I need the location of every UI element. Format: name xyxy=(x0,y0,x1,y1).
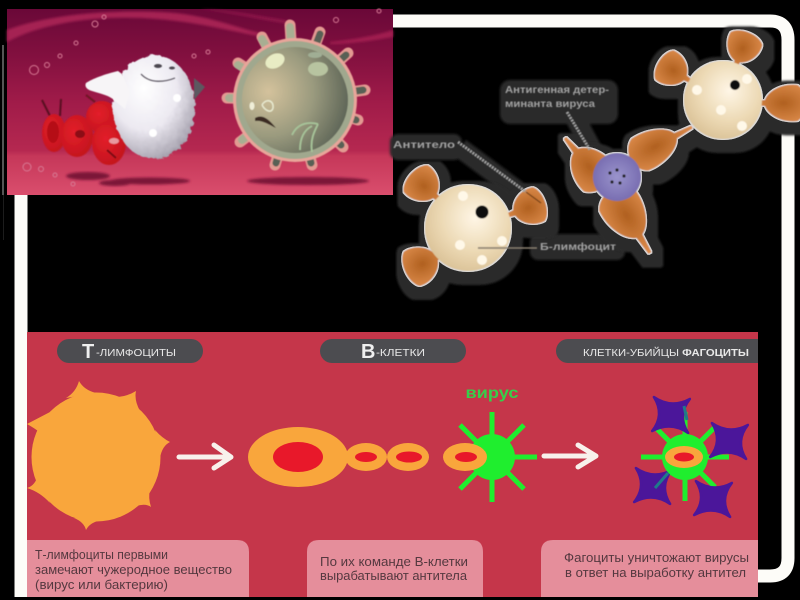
left cell xyxy=(397,160,551,289)
red blood cells xyxy=(42,95,126,165)
text block: B-cells: вырабатывают антитела xyxy=(320,569,467,583)
text block: T-lymphocytes xyxy=(27,540,249,597)
label: virus: вирус xyxy=(466,385,519,402)
text block: B-cells: По их команде В-клетки xyxy=(320,555,468,569)
heading: T-lymphocytes: -ЛИМФОЦИТЫ xyxy=(96,347,176,359)
icon: T-lymphocyte cell xyxy=(27,381,170,530)
white blood cell xyxy=(85,55,205,159)
text block: phagocytes: в ответ на выработку антител xyxy=(565,566,746,580)
virus xyxy=(227,25,365,165)
background waves xyxy=(7,9,393,44)
heading: B-cells xyxy=(320,339,466,363)
diagram labels and pointers: Б-лимфоцит xyxy=(540,241,616,253)
panel: immune response stages xyxy=(27,332,758,597)
diagram labels and pointers xyxy=(393,84,616,253)
diagram labels and pointers: Антигенная детер- xyxy=(505,84,610,96)
bubbles xyxy=(23,9,381,186)
middle virus with antibodies xyxy=(550,125,668,264)
diagram: antibodies binding cells xyxy=(397,26,800,289)
heading: T-lymphocytes: Т xyxy=(82,341,94,363)
text block: phagocytes: Фагоциты уничтожают вирусы xyxy=(564,551,749,565)
heading: T-lymphocytes xyxy=(57,339,203,363)
arrow xyxy=(179,445,231,468)
icon: B-cells xyxy=(248,427,429,487)
diagram labels and pointers: Антитело xyxy=(393,139,455,151)
heading: killer cells phagocytes xyxy=(556,339,758,363)
text block: B-cells xyxy=(307,540,483,597)
dark halo behind diagram labels xyxy=(390,80,625,260)
heading: B-cells: В xyxy=(361,341,375,363)
text block: T-lymphocytes: Т-лимфоциты первыми xyxy=(35,548,168,562)
heading: B-cells: -КЛЕТКИ xyxy=(376,347,425,359)
diagram labels and pointers: минанта вируса xyxy=(505,98,595,110)
phagocyte stars xyxy=(634,397,748,517)
icon: virus with B-cell xyxy=(443,412,537,502)
shadows on floor xyxy=(66,172,369,186)
text block: phagocytes xyxy=(541,540,758,597)
heading: killer cells phagocytes: КЛЕТКИ-УБИЙЦЫ ФАГОЦИТЫ xyxy=(583,346,749,359)
text block: T-lymphocytes: (вирус или бактерию) xyxy=(35,578,168,592)
right cell xyxy=(622,26,800,176)
picture: white blood cell and virus xyxy=(7,9,393,195)
arrow xyxy=(544,445,596,467)
icon: phagocytes attacking virus xyxy=(634,397,748,517)
text block: T-lymphocytes: замечают чужеродное вещество xyxy=(35,563,232,577)
